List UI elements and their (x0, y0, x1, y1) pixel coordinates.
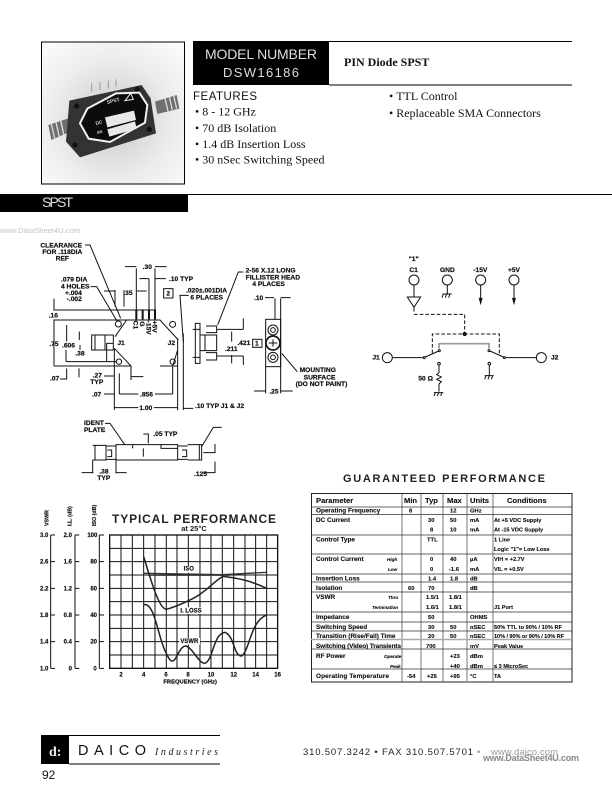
section bar: SPST: SPST (42, 194, 73, 210)
dimensions left: .16 (49, 312, 58, 319)
table rows: 40 (450, 557, 456, 563)
table rows: Switching (Video) Transients (316, 643, 401, 650)
heading: typical performance (112, 512, 276, 533)
table rows: °C (470, 674, 477, 680)
table rows: 1.6/1 (426, 605, 440, 611)
side view: .38 (99, 468, 109, 475)
pins (136, 309, 155, 319)
table rows: 0 (430, 557, 433, 563)
axis: I.L. (64, 506, 79, 672)
x axis labels: 14 (252, 673, 260, 679)
side view (82, 420, 222, 482)
table rows: +40 (450, 664, 460, 670)
table rows: 30 (428, 625, 434, 631)
curve: VSWR (144, 604, 267, 663)
pin labels: -15V (144, 321, 151, 335)
table rows: Switching Speed (316, 624, 367, 631)
axis: ISO: 100 (87, 533, 98, 539)
table rows: +23 (450, 654, 461, 660)
features list right (389, 89, 541, 120)
pin labels: +5V (151, 321, 158, 333)
dimension block: .07 (92, 392, 102, 399)
axis: ISO: 40 (90, 613, 98, 619)
table rows: 50 (428, 615, 434, 621)
side view: .125 (194, 471, 207, 478)
screw callout: FILLISTER HEAD (246, 274, 300, 281)
screw callout (218, 267, 300, 325)
header row (316, 496, 547, 505)
x axis labels: 12 (230, 673, 238, 679)
footer logo (41, 735, 220, 764)
axis: VSWR: 1.8 (40, 613, 49, 619)
table rows: Peak (390, 664, 401, 669)
pin labels: G (138, 321, 145, 327)
features list left: • 1.4 dB Insertion Loss (195, 137, 306, 151)
table rows: 70 (428, 586, 434, 592)
right ground (485, 362, 494, 379)
J1 connector (80, 335, 113, 350)
model number box (193, 41, 329, 85)
hole callout: +.004 (65, 290, 82, 297)
table rows: 1.8/1 (449, 595, 463, 601)
dimension .421 (237, 339, 262, 348)
table rows: Insertion Loss (316, 576, 360, 582)
table rows: 1.8 (450, 576, 459, 582)
features list left: • 8 - 12 GHz (195, 104, 256, 118)
footer contact: • (477, 747, 480, 758)
x axis labels: 6 (164, 673, 168, 679)
side connector view (193, 318, 243, 365)
axis: VSWR: VSWR (44, 510, 50, 526)
table rows: TTL (427, 538, 438, 544)
header row: Min (404, 496, 417, 505)
note marker 2: 2 (166, 290, 170, 297)
holes (115, 321, 176, 327)
table rows: Peak Value (494, 644, 523, 650)
header row: Max (447, 496, 463, 505)
pin C1: C1 (409, 267, 418, 274)
features list left (193, 91, 325, 166)
hole callout: -.002 (67, 296, 82, 303)
table rows: 60 (408, 586, 414, 592)
axis: I.L.: 0.8 (64, 613, 73, 619)
axis: I.L.: 0.4 (64, 640, 73, 646)
outline drawing: top view (40, 242, 244, 482)
table rows: Logic "1"= Low Loss (494, 547, 550, 553)
dimension .10 / .25: .10 (254, 295, 264, 302)
table rows: nSEC (470, 634, 486, 640)
side view: TYP (97, 475, 111, 482)
axis: ISO: 80 (90, 560, 98, 566)
table rows: 1 Line (494, 538, 510, 544)
axis: VSWR: 2.2 (40, 586, 49, 592)
curve labels (179, 566, 202, 645)
table rows: -54 (407, 674, 416, 680)
table rows: mA (470, 518, 480, 524)
panel: product photo (42, 42, 184, 184)
axis: I.L.: 2.0 (64, 533, 73, 539)
table rows: 20 (428, 634, 434, 640)
table rows: 50 (450, 518, 456, 524)
footer watermark: www.DataSheet4U.com (482, 753, 579, 763)
x axis labels (119, 673, 282, 686)
dimensions left: .75 (49, 341, 59, 348)
screw callout: 2-56 X.12 LONG (246, 267, 296, 274)
footer logo: d: (49, 745, 61, 760)
x axis labels: 16 (274, 673, 282, 679)
body bottom (54, 330, 183, 410)
heading: typical performance: TYPICAL PERFORMANCE (112, 512, 276, 526)
table rows: mV (470, 644, 479, 650)
side view: .05 TYP (153, 431, 178, 438)
model number box: MODEL NUMBER (205, 46, 317, 62)
features list right: • Replaceable SMA Connectors (389, 106, 541, 120)
pin +5V (508, 267, 521, 303)
table rows: VIL = +0.5V (494, 567, 524, 573)
50 ohm termination: 50 Ω (418, 376, 434, 383)
dimension .30 and .10 typ: .35 (123, 290, 133, 297)
dimension block (50, 350, 244, 412)
table rows: 10 (450, 528, 456, 534)
axis: VSWR (40, 510, 55, 672)
table rows: +25 (427, 674, 438, 680)
J2 label: J2 (168, 340, 175, 347)
footer logo: Industries (154, 747, 218, 758)
line chart: typical performance (40, 504, 282, 686)
dimensions left: .606 (62, 342, 75, 349)
header row: Parameter (316, 496, 353, 505)
curve: I.LOSS (144, 557, 267, 609)
table rows: High (387, 557, 397, 562)
side view: PLATE (84, 427, 106, 434)
table rows (316, 508, 565, 680)
end view (266, 298, 281, 393)
header row: Typ (425, 496, 438, 505)
features list left: FEATURES (193, 91, 257, 103)
watermark: www.DataSheet4U.com (0, 226, 80, 235)
table rows: mA (470, 567, 480, 573)
dimension .30 and .10 typ: .30 (143, 264, 152, 271)
table rows: Control Current (316, 556, 364, 563)
axis: ISO: 60 (90, 586, 98, 592)
curve: ISO (144, 572, 267, 575)
axis: VSWR: 2.6 (40, 560, 49, 566)
hole callout (61, 276, 117, 322)
table rows: 0 (430, 567, 433, 573)
footer contact: www.daico.com (490, 747, 558, 758)
table rows: dB (470, 586, 478, 592)
table rows: nSEC (470, 625, 486, 631)
table rows: dBm (470, 664, 483, 670)
features list left: • 30 nSec Switching Speed (195, 152, 325, 166)
curve labels: I. LOSS (180, 609, 202, 615)
features list left: • 70 dB Isolation (195, 121, 276, 135)
outline drawing: end views (186, 267, 347, 396)
table rows: 50 (450, 625, 456, 631)
table rows: dB (470, 576, 478, 582)
dimension .10 / .25 (254, 295, 293, 396)
heading: typical performance: at 25°C (181, 524, 207, 533)
dimension .421: 1 (255, 341, 259, 348)
x axis labels: 2 (119, 673, 123, 679)
dimension block: .07 (50, 376, 60, 383)
dimension .30 and .10 typ: .10 TYP (169, 276, 194, 283)
table rows: Control Type (316, 536, 355, 544)
mounting surface callout: (DO NOT PAINT) (296, 381, 347, 388)
mounting surface callout: MOUNTING (300, 367, 336, 374)
x axis labels: 10 (208, 673, 215, 679)
J2 port (488, 350, 559, 363)
hole note: .020±.001DIA (186, 287, 227, 294)
body top (53, 310, 178, 340)
table rows: 50 (450, 634, 456, 640)
model number box: DSW16186 (223, 65, 299, 80)
table rows: VSWR (316, 594, 336, 601)
features list right: • TTL Control (389, 89, 458, 103)
table rows: 30 (428, 518, 434, 524)
dimension block: .27 (93, 373, 102, 380)
dimension .30 and .10 typ (104, 264, 194, 310)
dimension .10 / .25: .25 (269, 389, 279, 396)
pin GND: GND (440, 267, 455, 274)
axis: ISO: 20 (90, 640, 98, 646)
table rows: TA (494, 674, 501, 680)
table rows: J1 Port (494, 605, 513, 611)
table rows: Low (388, 567, 398, 572)
hole callout: .079 DIA (61, 276, 87, 283)
J1 port: J1 (372, 355, 380, 362)
axis: ISO (87, 504, 104, 672)
table rows: Operate (384, 654, 402, 659)
table rows: dBm (470, 654, 483, 660)
dimensions left (49, 299, 79, 353)
table rows: 12 (450, 508, 456, 514)
axis: ISO: ISO (dB) (92, 504, 98, 526)
dimension block: .856 (140, 392, 153, 399)
dimension block: .10 TYP J1 & J2 (195, 403, 244, 410)
50 ohm termination (418, 362, 443, 396)
note marker 2 (164, 289, 173, 298)
axis: VSWR: 1.4 (40, 640, 49, 646)
table rows: VIH = +2.7V (494, 557, 525, 563)
panel: product photo: SN (96, 129, 103, 135)
pin +5V: +5V (508, 267, 521, 274)
axis: I.L.: 1.6 (64, 560, 73, 566)
x axis labels: 4 (142, 673, 146, 679)
table rows: 1.5/1 (426, 595, 440, 601)
table rows: Impedance (316, 614, 350, 621)
pin GND (440, 267, 455, 298)
heading: guaranteed performance: GUARANTEED PERFORMANCE (343, 473, 545, 485)
header row: Units (470, 496, 489, 505)
table rows: -1.6 (449, 567, 460, 573)
J1 port (372, 350, 440, 363)
schematic (372, 256, 559, 396)
table rows: ≤ 3 MicroSec (494, 664, 528, 670)
dimension .421: .421 (237, 340, 251, 347)
table rows: Operating Frequency (316, 508, 381, 514)
mounting surface callout: SURFACE (304, 374, 336, 381)
table rows: 50% TTL to 90% / 10% RF (494, 625, 563, 631)
clearance callout (40, 242, 121, 318)
footer logo: DAICO (78, 743, 146, 759)
x axis labels: FREQUENCY (GHz) (163, 680, 217, 686)
table rows: 1.4 (428, 576, 437, 582)
table rows: 700 (426, 644, 436, 650)
panel: product photo: SPST (106, 97, 120, 106)
table rows: OHMS (470, 615, 488, 621)
axis: I.L.: I.L. (dB) (68, 506, 74, 526)
curve labels: ISO (184, 567, 194, 573)
hole note: 6 PLACES (190, 294, 223, 301)
screw callout: 4 PLACES (252, 281, 285, 288)
side view: IDENT (84, 420, 104, 427)
table rows: Transition (Rise/Fall) Time (316, 633, 396, 640)
table rows: DC Current (316, 517, 351, 524)
header rules (329, 42, 572, 85)
section rule (188, 194, 612, 196)
pin -15V: -15V (473, 267, 488, 274)
J2 port: J2 (551, 355, 559, 362)
axis: I.L.: 0 (69, 666, 73, 672)
subtitle: PIN Diode SPST (344, 55, 429, 69)
axis: ISO: 0 (93, 666, 97, 672)
axis: I.L.: 1.2 (64, 586, 73, 592)
dimension block: TYP (90, 379, 104, 386)
axis: VSWR: 1.0 (40, 666, 49, 672)
pin -15V (473, 267, 488, 303)
mounting surface callout (282, 353, 347, 388)
quote 1: "1" (409, 256, 419, 263)
table: guaranteed performance (311, 494, 572, 682)
footer contact: 310.507.3242 • FAX 310.507.5701 (303, 747, 473, 758)
table rows: 8 (409, 508, 413, 514)
J1 label: J1 (117, 340, 125, 347)
header row: Conditions (507, 496, 547, 505)
section bar: SPST (0, 194, 188, 212)
table rows: 1.8/1 (449, 605, 463, 611)
axis: VSWR: 3.0 (40, 533, 49, 539)
.020 callout (180, 295, 189, 342)
table rows: 10% / 90% or 90% / 10% RF (494, 634, 565, 640)
switch arm bar (439, 344, 489, 349)
curve labels: VSWR (180, 639, 199, 645)
table rows: 8 (430, 528, 434, 534)
pin labels: C1 (131, 321, 138, 329)
table rows: µA (470, 557, 478, 563)
table rows: GHz (470, 508, 482, 514)
pin labels (131, 321, 158, 335)
table rows: RF Power (316, 653, 346, 660)
dimension block: .38 (75, 351, 85, 358)
page number: 92 (42, 768, 56, 782)
control dashed line (414, 314, 499, 353)
table rows: +95 (450, 674, 461, 680)
table rows: At +5 VDC Supply (494, 518, 542, 524)
clearance callout: REF (56, 255, 69, 262)
dimension block: 1.00 (139, 405, 153, 412)
table rows: Thru (388, 595, 398, 600)
panel: product photo: DC (95, 119, 103, 126)
footer contact (303, 747, 558, 758)
hole callout: 4 HOLES (61, 283, 90, 290)
plot grid (109, 535, 278, 668)
table rows: Termination (372, 605, 398, 610)
pin C1 (407, 267, 421, 312)
x axis labels: 8 (186, 673, 190, 679)
hole note (186, 287, 227, 301)
side connector view: .211 (225, 346, 238, 353)
table rows: Operating Temperature (316, 673, 389, 680)
clearance callout: FOR .118DIA (42, 249, 82, 256)
table rows: mA (470, 528, 480, 534)
table rows: At -15 VDC Supply (494, 528, 544, 534)
clearance callout: CLEARANCE (40, 242, 83, 249)
table rows: Isolation (316, 585, 342, 592)
